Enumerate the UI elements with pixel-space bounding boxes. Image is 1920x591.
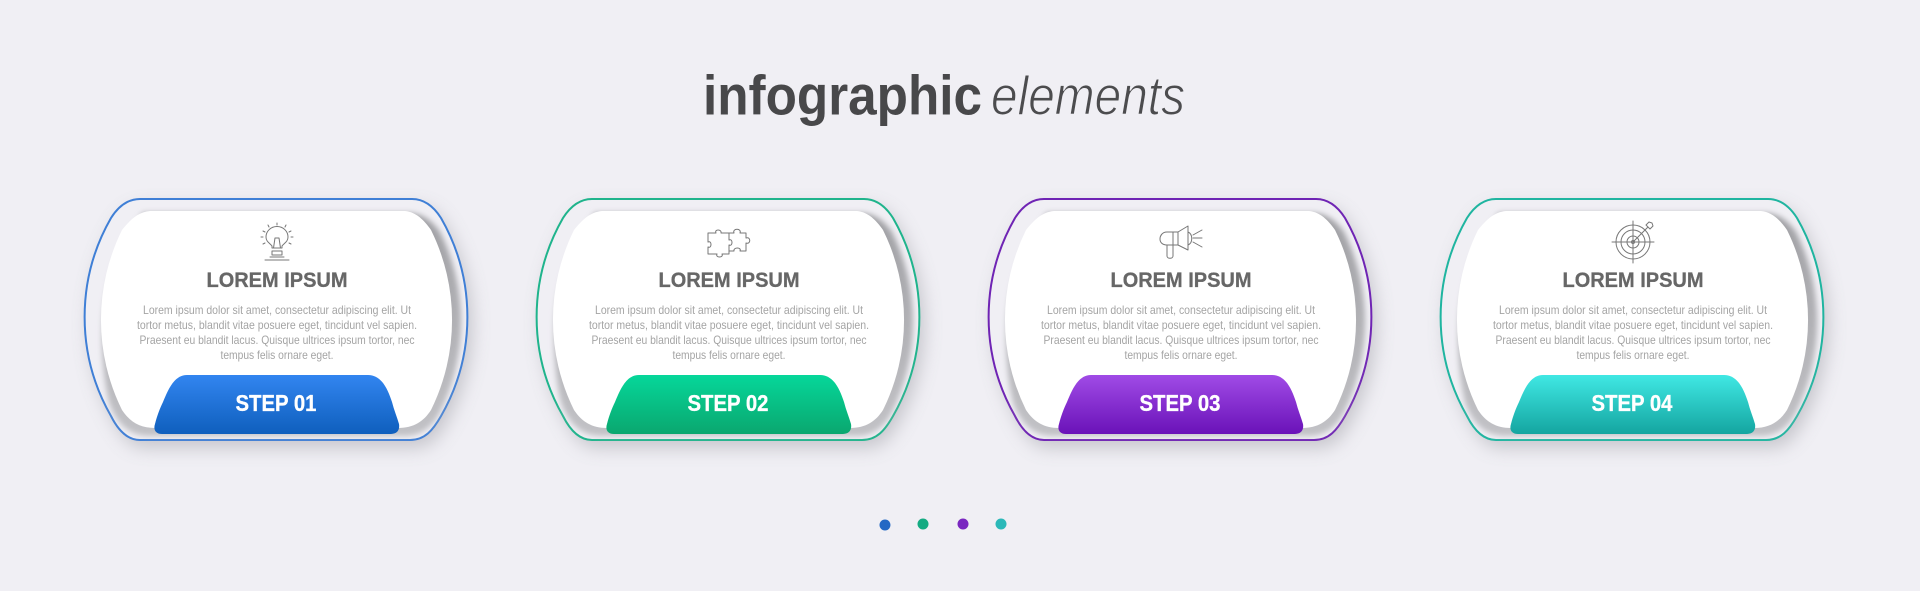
step button bbox=[1510, 375, 1755, 434]
step label: STEP 02 bbox=[688, 390, 768, 416]
card outline bbox=[85, 199, 467, 440]
body text bbox=[1493, 303, 1773, 362]
white card bbox=[553, 211, 904, 428]
white card bbox=[1005, 211, 1356, 428]
heading: LOREM IPSUM bbox=[1110, 269, 1252, 292]
body text: tempus felis ornare eget. bbox=[1124, 348, 1238, 362]
body text: tortor metus, blandit vitae posuere eget, tincidunt vel sapien. bbox=[1041, 318, 1321, 332]
body text: tortor metus, blandit vitae posuere eget, tincidunt vel sapien. bbox=[137, 318, 417, 332]
body text: Lorem ipsum dolor sit amet, consectetur adipiscing elit. Ut bbox=[143, 303, 412, 317]
icon: light bulb bbox=[261, 223, 293, 260]
icon: puzzle pieces bbox=[708, 229, 750, 257]
body text: Praesent eu blandit lacus. Quisque ultrices ipsum tortor, nec bbox=[1496, 333, 1770, 347]
card outline bbox=[537, 199, 919, 440]
body text: tortor metus, blandit vitae posuere eget, tincidunt vel sapien. bbox=[1493, 318, 1773, 332]
body text: tempus felis ornare eget. bbox=[1576, 348, 1690, 362]
icon: megaphone bbox=[1160, 226, 1202, 258]
body text: tortor metus, blandit vitae posuere eget, tincidunt vel sapien. bbox=[589, 318, 869, 332]
body text: Lorem ipsum dolor sit amet, consectetur adipiscing elit. Ut bbox=[1499, 303, 1768, 317]
step button bbox=[154, 375, 399, 434]
panel: step 03 bbox=[989, 199, 1376, 448]
heading: LOREM IPSUM bbox=[658, 269, 800, 292]
body text: Praesent eu blandit lacus. Quisque ultrices ipsum tortor, nec bbox=[1044, 333, 1318, 347]
white card bbox=[1457, 211, 1808, 428]
step label: STEP 03 bbox=[1140, 390, 1220, 416]
body text: Lorem ipsum dolor sit amet, consectetur adipiscing elit. Ut bbox=[595, 303, 864, 317]
body text: Praesent eu blandit lacus. Quisque ultrices ipsum tortor, nec bbox=[140, 333, 414, 347]
title: infographic bbox=[703, 64, 982, 126]
step label: STEP 01 bbox=[236, 390, 317, 416]
body text bbox=[137, 303, 417, 362]
body text: Praesent eu blandit lacus. Quisque ultrices ipsum tortor, nec bbox=[592, 333, 866, 347]
panel: step 02 bbox=[537, 199, 924, 448]
heading: LOREM IPSUM bbox=[206, 269, 348, 292]
body text: tempus felis ornare eget. bbox=[220, 348, 334, 362]
panel: step 04 bbox=[1441, 199, 1828, 448]
heading: LOREM IPSUM bbox=[1562, 269, 1704, 292]
title bbox=[703, 64, 1185, 126]
step button bbox=[606, 375, 851, 434]
title: elements bbox=[991, 64, 1185, 126]
icon: target bbox=[1612, 221, 1654, 263]
body text bbox=[589, 303, 869, 362]
card outline bbox=[1441, 199, 1823, 440]
white card bbox=[101, 211, 452, 428]
step button bbox=[1058, 375, 1303, 434]
body text: tempus felis ornare eget. bbox=[672, 348, 786, 362]
step label: STEP 04 bbox=[1592, 390, 1673, 416]
body text: Lorem ipsum dolor sit amet, consectetur adipiscing elit. Ut bbox=[1047, 303, 1316, 317]
card outline bbox=[989, 199, 1371, 440]
panel: step 01 bbox=[85, 199, 472, 448]
pagination dots bbox=[880, 518, 1006, 530]
body text bbox=[1041, 303, 1321, 362]
